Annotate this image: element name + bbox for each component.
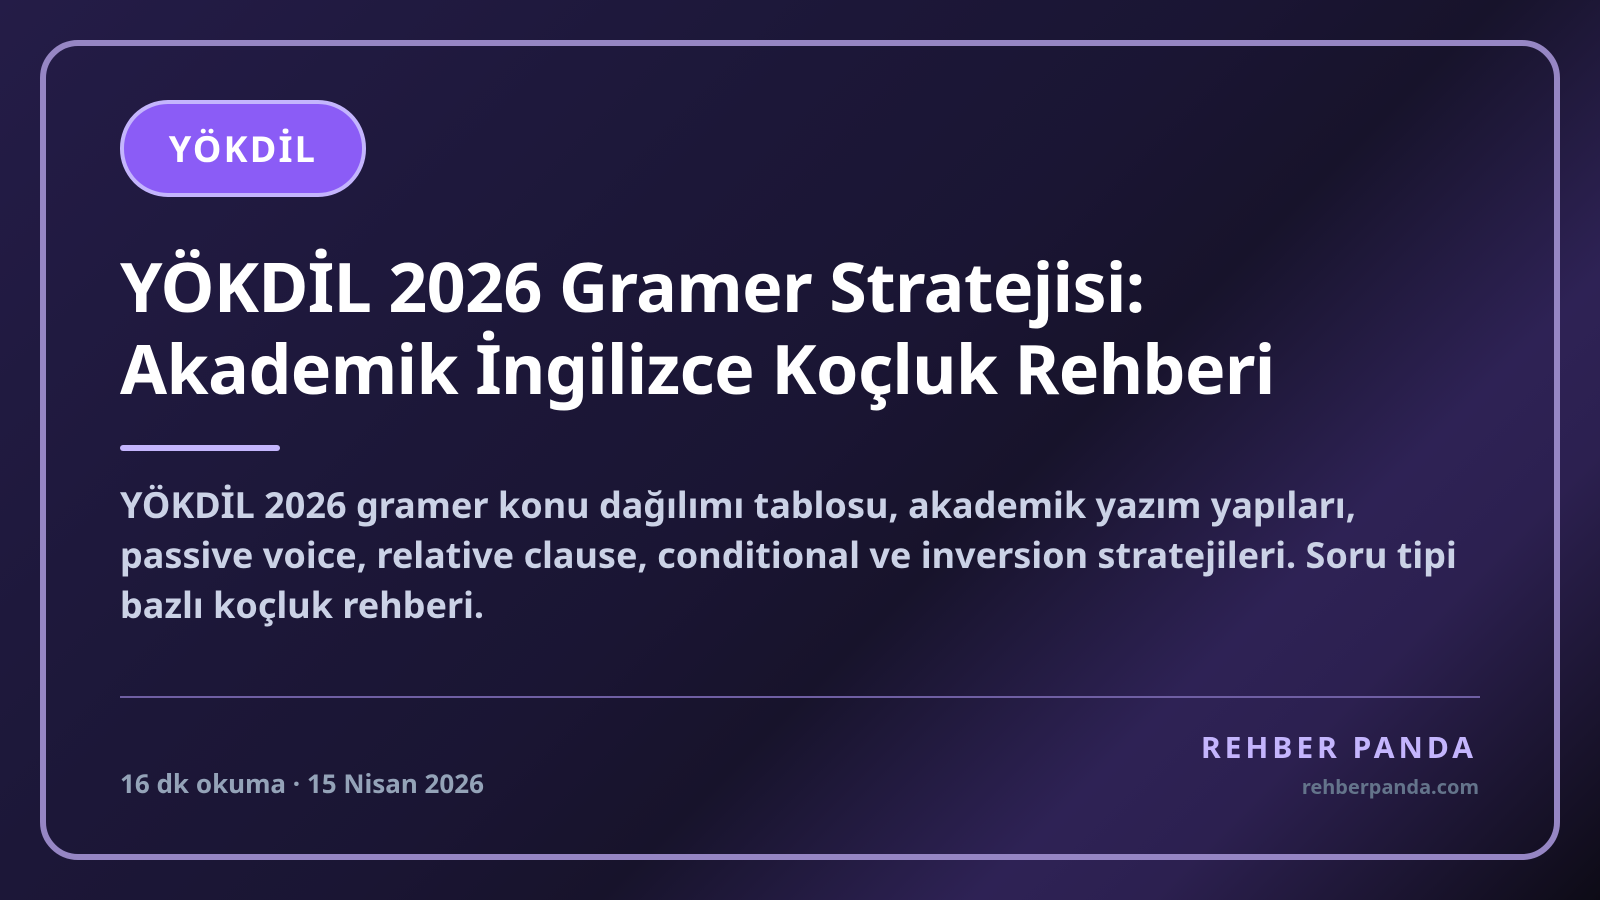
description text: bazlı koçluk rehberi. bbox=[120, 580, 484, 629]
badge: category pill: YÖKDİL bbox=[169, 124, 317, 173]
description text: passive voice, relative clause, conditional ve inversion stratejileri. Soru tipi bbox=[120, 530, 1457, 579]
title: Akademik İngilizce Koçluk Rehberi bbox=[120, 321, 1275, 414]
brand name: REHBER PANDA bbox=[1201, 726, 1477, 767]
reading time and date: 16 dk okuma · 15 Nisan 2026 bbox=[120, 765, 484, 801]
footer divider bbox=[120, 696, 1480, 698]
website url: rehberpanda.com bbox=[1302, 773, 1479, 800]
title bbox=[120, 239, 1275, 414]
description text bbox=[120, 480, 1457, 629]
title: YÖKDİL 2026 Gramer Stratejisi: bbox=[120, 239, 1144, 332]
badge: category pill bbox=[120, 100, 366, 197]
accent divider bbox=[120, 445, 280, 451]
description text: YÖKDİL 2026 gramer konu dağılımı tablosu, akademik yazım yapıları, bbox=[120, 480, 1356, 529]
